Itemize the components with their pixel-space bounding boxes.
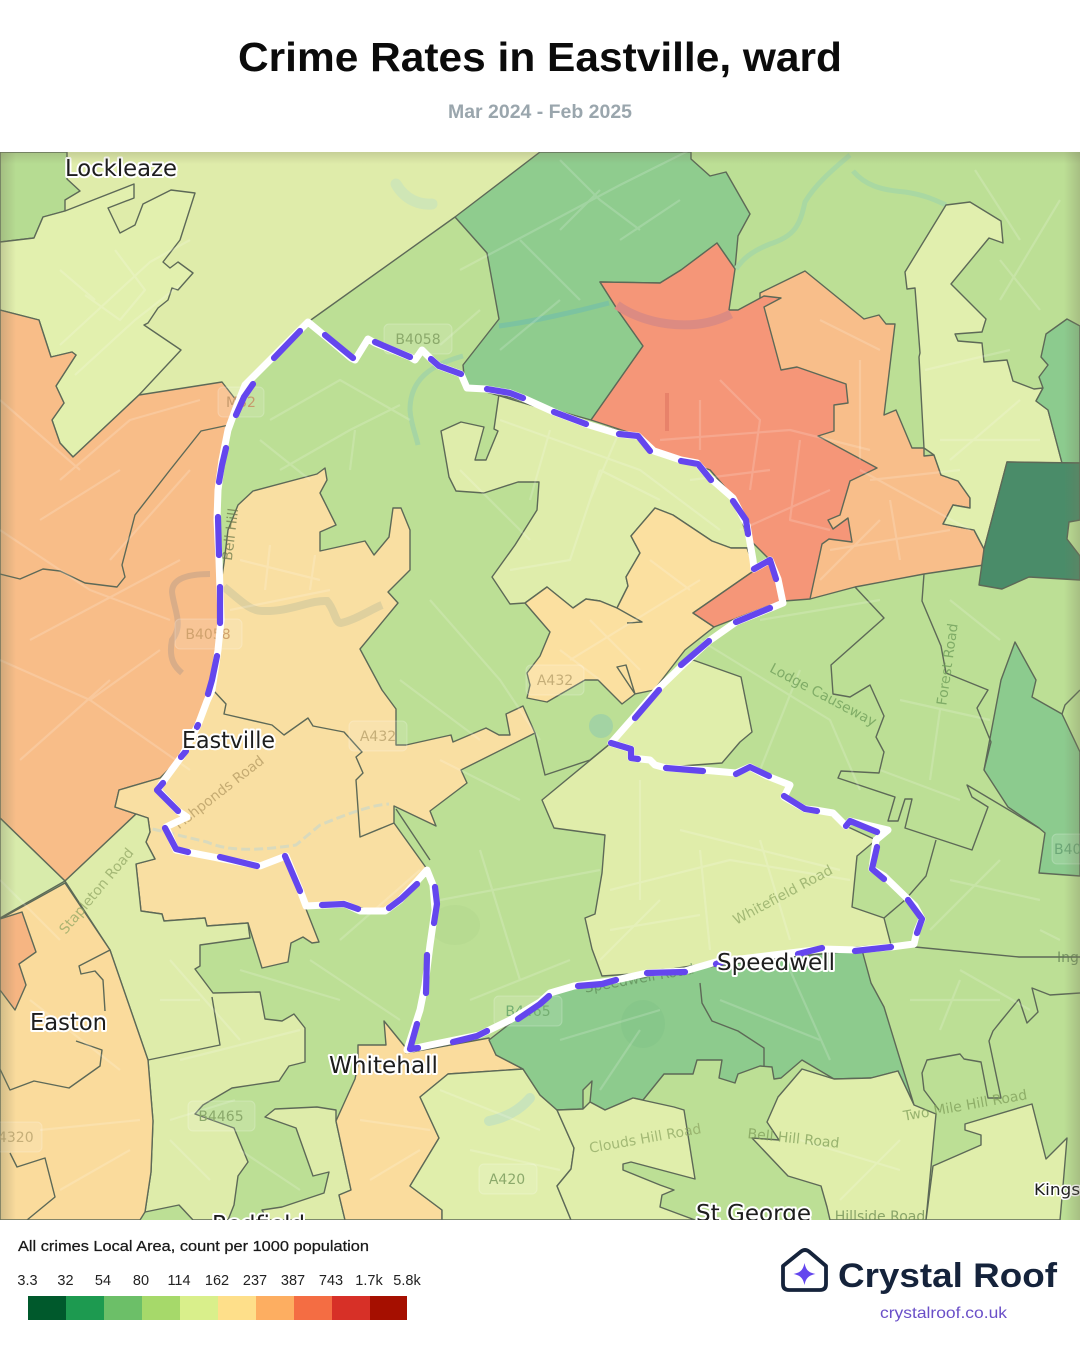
- street network: [0, 150, 1060, 1200]
- area: west orange ward: [0, 310, 236, 881]
- area: east orange ward: [760, 271, 984, 599]
- area: Speedwell light ward: [542, 743, 891, 976]
- road label: B4465 east: B4465: [505, 1004, 551, 1020]
- road label: A432 east: A432: [537, 673, 573, 689]
- area: far east green ward: [1036, 319, 1080, 463]
- road label: A432 west: [349, 721, 407, 751]
- road label: B4058 north: B4058: [395, 332, 441, 348]
- legend scale values: 162: [205, 1273, 229, 1289]
- legend title: All crimes Local Area, count per 1000 population: [18, 1239, 369, 1255]
- area: salmon high-crime ward: [591, 243, 877, 601]
- legend scale values: 387: [281, 1273, 305, 1289]
- road label: M32: M32: [226, 395, 256, 411]
- river: east of ward: [410, 356, 463, 445]
- line: yellow ward separators: [213, 690, 394, 837]
- road label: A420: A420: [489, 1172, 525, 1188]
- road label: A432 east: [526, 665, 584, 695]
- place label: Speedwell: Speedwell: [717, 950, 835, 976]
- place label: Lockleaze: Lockleaze: [65, 156, 177, 182]
- ponds and park patches: [396, 184, 665, 1121]
- road label: M32: [218, 387, 264, 417]
- street name: Forest Road: Forest Road: [934, 622, 962, 706]
- area: north yellow ward A432: [525, 508, 755, 704]
- river: yellow ward: [224, 587, 382, 623]
- subtitle: date range: Mar 2024 - Feb 2025: [448, 102, 632, 123]
- logo wordmark: Crystal Roof: [838, 1257, 1058, 1295]
- area: north of speedwell light ward: [611, 660, 752, 768]
- area: north-west open land: [66, 152, 538, 397]
- legend colour bar: [28, 1296, 407, 1320]
- area: Bell Hill Road light ward: [752, 1069, 936, 1220]
- area: central light ward: [441, 385, 750, 608]
- area: east dark green ward: [984, 642, 1080, 876]
- line: Easton sub-boundaries: [0, 950, 220, 1220]
- street name: Hillside Road: Hillside Road: [835, 1209, 925, 1225]
- legend scale values: 114: [167, 1273, 191, 1289]
- street name: Whitefield Road: Whitefield Road: [731, 862, 836, 928]
- street name: Stapleton Road: Stapleton Road: [56, 845, 137, 938]
- icon: purple star: [794, 1263, 816, 1285]
- road label: B4465 west: [188, 1101, 255, 1131]
- logo: Crystal Roof: [783, 1250, 1058, 1322]
- area: Easton yellow ward: [0, 883, 153, 1220]
- street name: Speedwell Road: Speedwell Road: [583, 962, 696, 997]
- line: yellow ward notch: [617, 608, 642, 623]
- road label: B4058 west: [175, 619, 242, 649]
- place label: Redfield: Redfield: [212, 1212, 305, 1238]
- road label: B40 east: [1052, 834, 1080, 864]
- road label: A420: [479, 1164, 537, 1194]
- line: south green divider: [700, 983, 764, 1066]
- area: Whitehall yellow ward: [336, 1021, 523, 1220]
- river: through dark green: [499, 303, 609, 326]
- area: far-west wedge: [0, 818, 65, 918]
- title: Crime Rates in Eastville, ward: [238, 34, 842, 80]
- river: through salmon ward: [617, 305, 731, 325]
- area: light ward by Redfield: [262, 1107, 351, 1220]
- street name: Ing: Ing: [1057, 950, 1079, 966]
- legend scale values: 743: [319, 1273, 343, 1289]
- area: dark green lowest-crime ward: [979, 462, 1080, 589]
- road label: A432 west: A432: [360, 729, 396, 745]
- road label: B4465 west: B4465: [198, 1109, 244, 1125]
- place label: St George: St George: [696, 1201, 811, 1227]
- line: middle ward boundary: [396, 733, 611, 860]
- area: small orange ward: [0, 912, 36, 1010]
- detail: railway mark: [665, 393, 669, 431]
- road label: B4058 north: [384, 324, 452, 354]
- legend scale values: 80: [133, 1273, 149, 1289]
- legend scale values: 1.7k: [355, 1273, 383, 1289]
- road label: B4058 west: B4058: [185, 627, 231, 643]
- website url: crystalroof.co.uk: [880, 1305, 1008, 1322]
- ward boundary: white base line: [158, 322, 922, 1050]
- road label: A4320: [0, 1122, 42, 1152]
- area: far north-west green: [0, 152, 80, 242]
- place label: Whitehall: Whitehall: [329, 1053, 438, 1079]
- area: west light wards Stapleton: [65, 814, 305, 1220]
- legend scale values: 237: [243, 1273, 267, 1289]
- street name: Bell Hill: Bell Hill: [220, 507, 242, 562]
- line: orange ward divider: [0, 425, 229, 587]
- place label: Eastville: Eastville: [182, 728, 275, 754]
- area: north dark green ward: [455, 152, 750, 420]
- place label: Easton: Easton: [30, 1010, 107, 1036]
- canal: south yellow ward: [140, 804, 389, 849]
- street name: Fishponds Road: Fishponds Road: [172, 753, 267, 833]
- legend scale values: 54: [95, 1273, 111, 1289]
- legend scale values: 5.8k: [393, 1273, 421, 1289]
- area: Clouds Hill light ward: [557, 1098, 695, 1220]
- area: salmon triangle: [693, 559, 781, 627]
- legend scale values: 3.3: [17, 1273, 38, 1289]
- area: Lockleaze light ward: [0, 184, 195, 457]
- legend: [17, 1239, 421, 1320]
- area: east light ward: [905, 202, 1062, 549]
- line: north-west boundary: [308, 217, 455, 322]
- street name: Bell Hill Road: Bell Hill Road: [747, 1126, 840, 1152]
- legend scale values: [17, 1273, 421, 1289]
- river: orange ward loop: [171, 574, 210, 673]
- line: eastern ward boundaries: [831, 574, 1080, 1110]
- area: Speedwell south dark green ward: [489, 950, 914, 1110]
- street name: Lodge Causeway: Lodge Causeway: [767, 661, 879, 730]
- road label: B4465 east: [494, 996, 562, 1026]
- legend scale values: 32: [57, 1273, 74, 1289]
- ward boundary: purple dashes: [157, 331, 922, 1049]
- street name: Two Mile Hill Road: Two Mile Hill Road: [901, 1087, 1028, 1125]
- icon: house outline: [783, 1250, 826, 1290]
- area: Two Mile Hill light ward: [926, 1104, 1067, 1220]
- river: north: [736, 155, 946, 269]
- area: A420 light ward: [410, 1069, 574, 1220]
- area: Eastville yellow wards: [115, 468, 535, 968]
- street name: Clouds Hill Road: Clouds Hill Road: [588, 1121, 703, 1157]
